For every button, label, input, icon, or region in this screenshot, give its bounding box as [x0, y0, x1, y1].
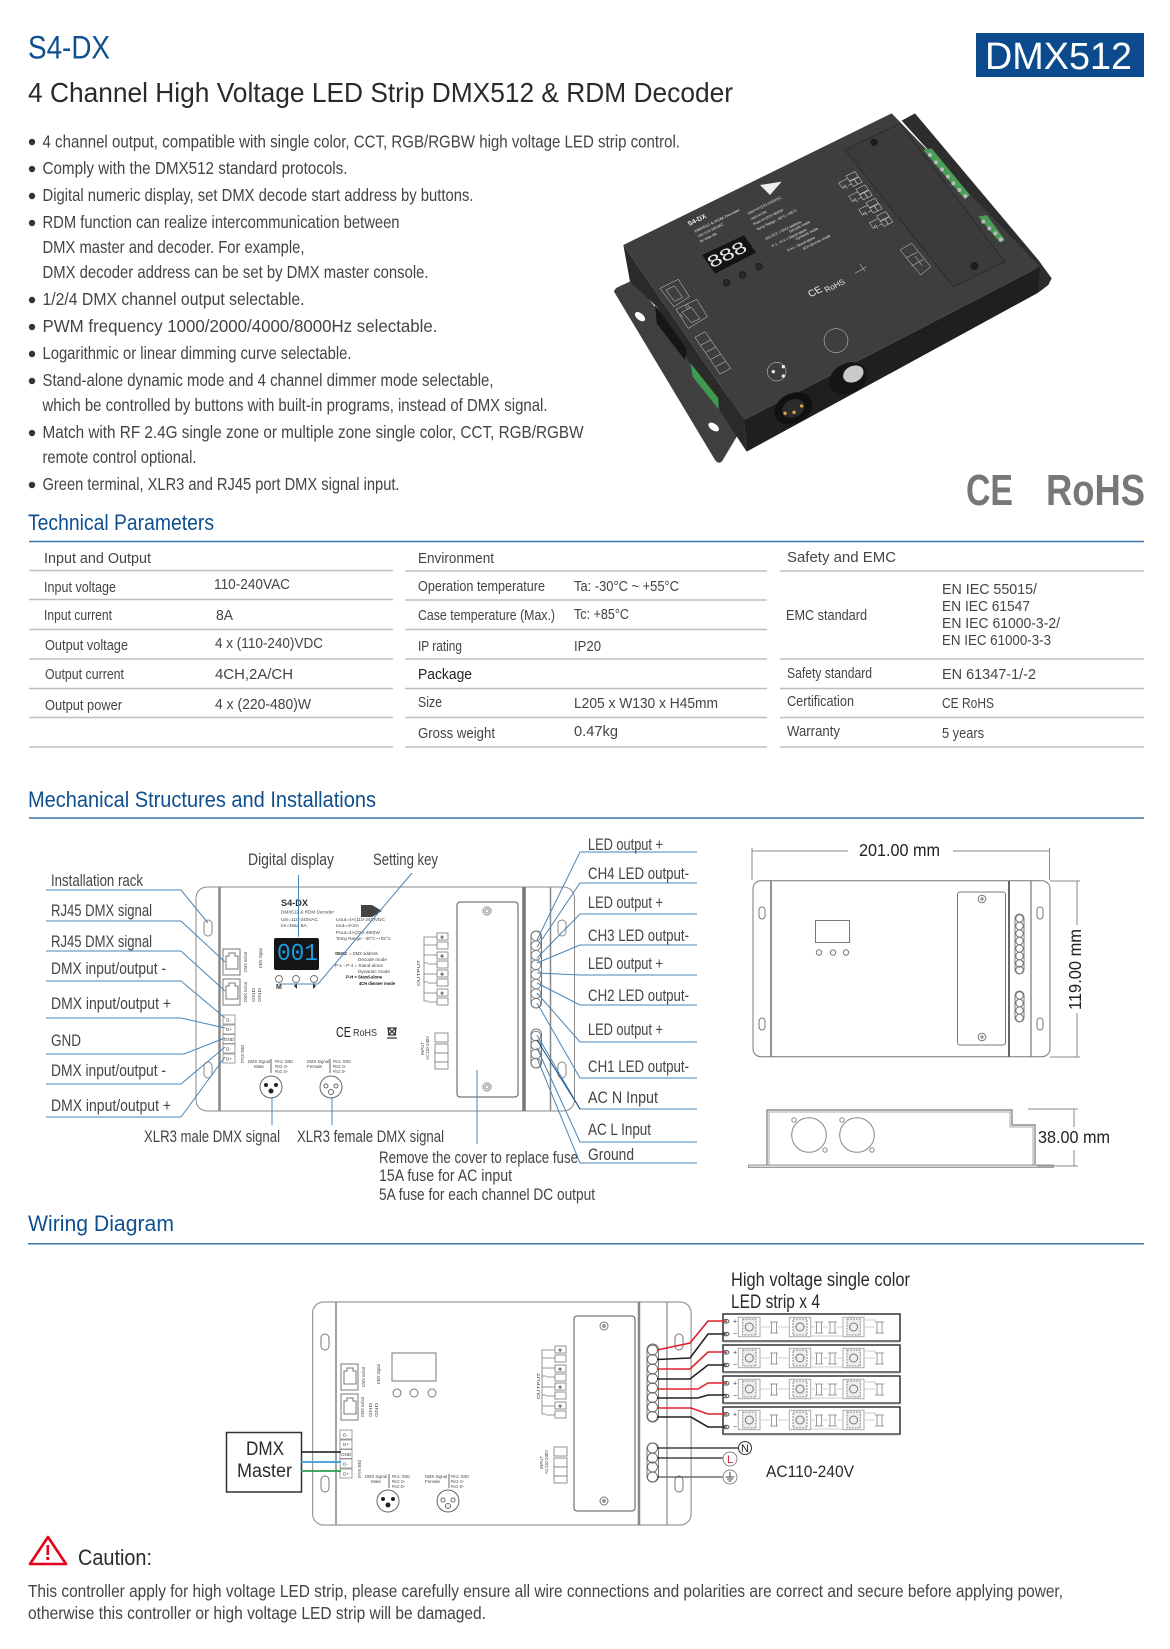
heading: Technical Parameters: Technical Parameters — [28, 510, 214, 535]
diagram: wiring device outline: DMX Signal — [365, 1474, 387, 1479]
callout labels: right: CH4 LED output- — [588, 864, 689, 883]
table: environment and package: Gross weight — [418, 725, 496, 742]
table: environment and package: IP rating — [418, 638, 462, 655]
feature list: Match with RF 2.4G single zone or multiple zone single color, CCT, RGB/RGBW — [42, 422, 584, 442]
diagram: device front panel with callouts: = DMX address — [349, 951, 379, 956]
diagram: device front panel with callouts: Pin3: D+ — [275, 1069, 288, 1074]
output terminal block — [531, 931, 542, 1008]
product photo: decoder device: RoHS — [823, 278, 847, 294]
diagram: device front panel with callouts: DMX In/out — [243, 981, 248, 1002]
diagram: device front panel with callouts: S4-DX — [281, 898, 308, 908]
feature list: DMX decoder address can be set by DMX master console. — [42, 262, 428, 282]
LED strip label — [731, 1270, 911, 1313]
callout labels: right: AC N Input — [588, 1088, 658, 1107]
diagram: device front panel with callouts: P-H = Stand-alone — [346, 974, 382, 980]
feature list: DMX master and decoder. For example, — [42, 237, 304, 257]
table: input and output: 4 x (220-480)W — [215, 696, 312, 713]
diagram: device front panel with callouts: Temp Range: -30°C~+55°C — [336, 936, 392, 941]
callout labels: top and bottom: Digital display — [248, 850, 334, 869]
AC input wires and symbols: L — [727, 1454, 733, 1466]
table: environment and package: IP20 — [574, 638, 601, 655]
diagram: wiring device outline: Pin1: GND — [451, 1474, 470, 1479]
diagram: device front panel with callouts: + — [440, 972, 444, 978]
product subtitle: 4 Channel High Voltage LED Strip DMX512 & RDM Decoder — [28, 77, 733, 108]
callout labels: left: DMX input/output + — [51, 994, 171, 1013]
diagram: wiring device outline: GND — [374, 1402, 379, 1417]
diagram: device front panel with callouts: DMX Signal — [307, 1059, 329, 1064]
feature list — [29, 132, 680, 494]
product photo: decoder device: Iin=Max 8A — [699, 232, 718, 243]
callout labels: left: GND — [51, 1031, 81, 1050]
table: environment and package: 0.47kg — [574, 723, 618, 740]
table: safety and EMC: Safety standard — [787, 665, 872, 682]
diagram: device front panel with callouts: CE — [336, 1024, 351, 1041]
callout labels: top and bottom: Remove the cover to replace fuse — [379, 1148, 578, 1167]
diagram: device front panel with callouts: Pin1: GND — [333, 1059, 352, 1064]
table: environment and package: L205 x W130 x H45mm — [574, 695, 718, 712]
callout labels: left: DMX input/output - — [51, 959, 166, 978]
CE RoHS certification logos: RoHS — [1046, 466, 1145, 515]
diagram: wiring device outline: DMX Signal — [376, 1364, 381, 1384]
diagram: device front panel with callouts: Male — [254, 1064, 264, 1069]
diagram: wiring device outline: D+ — [343, 1442, 349, 1447]
callout labels: left: Installation rack — [51, 871, 143, 890]
diagram: wiring device outline: D+ — [343, 1472, 349, 1476]
diagram: wiring device outline: INPUT — [539, 1456, 544, 1469]
product photo: decoder device: Temp Range: -30°C~+55°C — [756, 208, 798, 231]
diagram: device front panel with callouts: D- — [226, 1018, 231, 1022]
diagram: top view with dimensions — [752, 840, 1085, 1057]
diagram: wiring device outline: Pin3: D+ — [451, 1484, 464, 1489]
diagram: device front panel with callouts: DMX Signal — [258, 948, 263, 968]
table: safety and EMC: EN IEC 61000-3-3 — [942, 632, 1051, 649]
diagram: wiring device outline: Female — [425, 1479, 440, 1484]
diagram: device front panel with callouts: 001-512 — [335, 951, 347, 956]
diagram: top view with dimensions: 201.00 mm — [859, 840, 940, 860]
diagram: device front panel with callouts: GND — [224, 1037, 235, 1042]
diagram: device front panel with callouts: Pin2: D- — [333, 1064, 346, 1069]
diagram: device front panel with callouts: Pin2: D- — [275, 1064, 288, 1069]
LED strips x 4: + — [733, 1318, 737, 1326]
LED strips x 4: + — [733, 1380, 737, 1388]
feature list: Logarithmic or linear dimming curve selectable. — [42, 343, 352, 363]
callout labels: right: CH3 LED output- — [588, 926, 689, 945]
diagram: wiring device outline: GND — [341, 1452, 352, 1457]
diagram: wiring device outline: Pin2: D- — [451, 1479, 464, 1484]
table: environment and package: Operation temperature — [418, 578, 545, 595]
DMX signal wires — [301, 1452, 341, 1471]
product photo: decoder device: Uin=110-240VAC — [697, 222, 725, 238]
table: input and output: 8A — [216, 607, 233, 624]
LED strip wires — [657, 1321, 725, 1427]
AC input wires and symbols: N — [741, 1443, 749, 1455]
diagram: device front panel with callouts: P-1 - P-4 = Stand-alone — [335, 963, 383, 968]
diagram: device front panel with callouts: INPUT — [420, 1042, 425, 1055]
LED strips x 4: − — [733, 1424, 737, 1431]
diagram: device front panel with callouts: DMX In/out — [243, 951, 248, 972]
product photo: decoder device: DMX512 & RDM Decoder — [694, 208, 742, 233]
icon: caution triangle — [30, 1537, 66, 1564]
table: safety and EMC: EN IEC 61000-3-2/ — [942, 615, 1061, 632]
diagram: device front panel with callouts: Pin3: D+ — [333, 1069, 346, 1074]
diagram: device front panel with callouts: Pout=4×(220-480)W — [336, 930, 381, 935]
callout labels: left: RJ45 DMX signal — [51, 901, 152, 920]
LED strips x 4: + — [733, 1412, 737, 1418]
diagram: wiring device outline: D- — [343, 1432, 348, 1438]
DMX512 badge: DMX512 — [985, 36, 1132, 78]
diagram: wiring device outline: Pin1: GND — [392, 1474, 411, 1479]
diagram: device front panel with callouts: GND — [251, 987, 256, 1002]
diagram: device front panel with callouts: DMX Signal — [248, 1059, 270, 1064]
CE RoHS certification logos — [966, 466, 1145, 515]
diagram: device front panel with callouts: Decode mode — [358, 957, 387, 962]
table: environment and package: Case temperature (Max.) — [418, 607, 555, 624]
product photo: decoder device: P-1 - P-4 = Stand-alone — [771, 228, 808, 248]
feature list: remote control optional. — [42, 447, 196, 467]
callout labels: right — [588, 835, 689, 1164]
callout labels: right: LED output + — [588, 893, 663, 912]
diagram: wiring device outline: Male — [371, 1479, 381, 1484]
callout lines — [46, 852, 697, 1163]
diagram: wiring device outline: Pin3: D+ — [392, 1484, 405, 1489]
diagram: device front panel with callouts: Iin=Max 8A — [281, 923, 308, 928]
table: input and output: Output current — [45, 666, 125, 683]
diagram: device front panel with callouts: Female — [307, 1064, 322, 1069]
diagram: top view with dimensions: 119.00 mm — [1065, 929, 1085, 1010]
LED strips x 4: − — [733, 1393, 737, 1400]
diagram: device front panel with callouts: DMX In/out — [240, 1045, 245, 1064]
callout labels: right: CH1 LED output- — [588, 1057, 689, 1076]
DMX master box: Master — [237, 1461, 293, 1482]
diagram: device front panel with callouts: GND — [257, 987, 262, 1002]
diagram: wiring device outline: + — [558, 1404, 562, 1410]
caution heading: Caution: — [78, 1545, 152, 1570]
table: safety and EMC: EN 61347-1/-2 — [942, 666, 1036, 683]
feature list: PWM frequency 1000/2000/4000/8000Hz selectable. — [42, 316, 438, 336]
product photo: decoder device: S4-DX — [686, 213, 709, 228]
feature list: Green terminal, XLR3 and RJ45 port DMX signal input. — [42, 474, 400, 494]
table: environment and package: Environment — [418, 550, 495, 567]
diagram: wiring device outline: DMX Signal — [425, 1474, 447, 1479]
product photo: decoder device: Uout=4×(110-240)VDC — [747, 196, 783, 215]
diagram: device front panel with callouts: Uin=110-240VAC — [281, 917, 319, 922]
table: safety and EMC: EMC standard — [786, 607, 867, 624]
diagram: device front panel with callouts: D- — [226, 1046, 231, 1052]
diagram: device front panel with callouts: Dynamic mode — [358, 969, 390, 974]
diagram: device front panel with callouts: + — [440, 954, 444, 960]
heading: Wiring Diagram: Wiring Diagram — [28, 1211, 174, 1236]
diagram: wiring device outline: DMX In/out — [360, 1396, 365, 1417]
product photo: decoder device: Pout=4×(220-480)W — [752, 208, 785, 226]
table: environment and package — [405, 550, 767, 747]
callout labels: left: RJ45 DMX signal — [51, 932, 152, 951]
table: safety and EMC — [780, 549, 1144, 747]
caution text — [28, 1581, 1063, 1623]
product photo: decoder device: Iout=4×2A — [750, 210, 768, 221]
callout labels: right: LED output + — [588, 835, 663, 854]
caution text: This controller apply for high voltage LED strip, please carefully ensure all wire connections and polarities are correct and secure before applying power, — [28, 1581, 1063, 1601]
LED strips x 4: + — [733, 1350, 737, 1356]
callout labels: top and bottom: XLR3 female DMX signal — [297, 1127, 444, 1146]
callout labels: left — [51, 871, 171, 1115]
table: input and output: Output voltage — [45, 637, 128, 654]
product photo: decoder device: 001-512 = DMX address — [764, 220, 802, 241]
feature list: Digital numeric display, set DMX decode start address by buttons. — [42, 185, 474, 205]
table: input and output: Output power — [45, 697, 122, 714]
callout labels: right: LED output + — [588, 954, 663, 973]
heading: Mechanical Structures and Installations: Mechanical Structures and Installations — [28, 787, 376, 812]
table: input and output — [29, 550, 393, 747]
table: input and output: Input and Output — [44, 550, 152, 567]
diagram: wiring device outline: Pin2: D- — [392, 1479, 405, 1484]
feature list: 1/2/4 DMX channel output selectable. — [42, 289, 304, 309]
table: safety and EMC: CE RoHS — [942, 695, 994, 712]
CE RoHS certification logos: CE — [966, 466, 1013, 515]
AC voltage label: AC110-240V — [766, 1462, 855, 1481]
diagram: device front panel with callouts: RoHS — [353, 1028, 377, 1039]
DMX master box — [226, 1432, 302, 1492]
diagram: device front panel with callouts: + — [440, 990, 444, 998]
diagram: device front panel with callouts: 4CH dimmer mode — [359, 981, 395, 986]
diagram: wiring device outline: DMX In/out — [361, 1366, 366, 1387]
feature list: Stand-alone dynamic mode and 4 channel dimmer mode selectable, — [42, 370, 494, 390]
table: safety and EMC: Warranty — [787, 723, 840, 740]
diagram: wiring device outline: DMX In/out — [357, 1460, 362, 1479]
diagram: wiring device outline: + — [558, 1384, 562, 1392]
LED strip label: LED strip x 4 — [731, 1292, 820, 1313]
feature list: 4 channel output, compatible with single color, CCT, RGB/RGBW high voltage LED strip control. — [42, 132, 680, 152]
diagram: side view with height dimension: 38.00 mm — [1038, 1127, 1110, 1147]
LED strips x 4: − — [733, 1331, 737, 1338]
AC terminal block — [531, 1029, 542, 1068]
diagram: wiring device outline: + — [558, 1366, 562, 1374]
product photo: decoder device: Decode mode — [788, 220, 811, 233]
product photo: decoder device: 4CH dimmer mode — [802, 234, 831, 251]
DMX master box: DMX — [246, 1439, 284, 1460]
table: input and output: 4 x (110-240)VDC — [215, 635, 323, 652]
callout labels: right: AC L Input — [588, 1120, 651, 1139]
diagram: device front panel with callouts: + — [440, 934, 444, 942]
LED strips x 4 — [723, 1314, 900, 1434]
product photo: decoder device: Dynamic mode — [795, 227, 819, 241]
table: safety and EMC: Safety and EMC — [787, 549, 896, 566]
product photo: decoder device: 888 — [703, 237, 751, 272]
product photo: decoder device: CE — [806, 284, 825, 300]
callout labels: left: DMX input/output + — [51, 1096, 171, 1115]
table: safety and EMC: EN IEC 55015/ — [942, 581, 1038, 598]
callout labels: top and bottom: Setting key — [373, 850, 438, 869]
table: environment and package: Size — [418, 694, 442, 711]
diagram: device front panel with callouts: AC110-240V — [425, 1035, 430, 1060]
diagram: device front panel with callouts — [46, 835, 697, 1204]
diagram: device front panel with callouts: D+ — [226, 1027, 232, 1032]
table: input and output: 4CH,2A/CH — [215, 666, 293, 683]
diagram: wiring device outline: D- — [343, 1462, 348, 1466]
diagram: device front panel with callouts: Iout=4×2A — [336, 923, 360, 928]
product photo: decoder device: P-H = Stand-alone — [787, 236, 816, 252]
table: safety and EMC: EN IEC 61547 — [942, 598, 1030, 615]
AC input wires and symbols — [657, 1442, 752, 1484]
digital display: 001 — [277, 941, 318, 968]
LED strip label: High voltage single color — [731, 1270, 911, 1291]
callout labels: right: Ground — [588, 1145, 634, 1164]
diagram: device front panel with callouts: DMX512 & RDM Decoder — [281, 910, 334, 914]
product model title: S4-DX — [28, 30, 110, 66]
callout labels: right: LED output + — [588, 1020, 663, 1039]
diagram: wiring device outline: GND — [368, 1402, 373, 1417]
LED strips x 4: − — [733, 1362, 737, 1369]
table: environment and package: Ta: -30°C ~ +55°C — [574, 578, 679, 595]
callout labels: top and bottom: XLR3 male DMX signal — [144, 1127, 280, 1146]
feature list: which be controlled by buttons with built-in programs, instead of DMX signal. — [42, 395, 547, 415]
diagram: wiring device outline: + — [558, 1348, 562, 1354]
feature list: Comply with the DMX512 standard protocols. — [42, 158, 348, 178]
callout labels: top and bottom — [144, 850, 595, 1204]
diagram: wiring device outline: OUTPUT — [536, 1373, 541, 1399]
callout labels: left: DMX input/output - — [51, 1061, 166, 1080]
table: input and output: 110-240VAC — [214, 576, 290, 593]
table: safety and EMC: Certification — [787, 693, 854, 710]
table: environment and package: Package — [418, 666, 472, 683]
diagram: device front panel with callouts: OUTPUT — [416, 960, 421, 986]
table: environment and package: Tc: +85°C — [574, 606, 629, 623]
diagram: device front panel with callouts: M — [276, 984, 282, 991]
caution text: otherwise this controller or high voltage LED strip will be damaged. — [28, 1603, 486, 1623]
table: safety and EMC: 5 years — [942, 725, 984, 742]
diagram: wiring device outline — [313, 1302, 691, 1525]
feature list: RDM function can realize intercommunication between — [42, 212, 400, 232]
callout labels: top and bottom: 15A fuse for AC input — [379, 1166, 512, 1185]
diagram: side view with height dimension — [748, 1109, 1110, 1168]
diagram: device front panel with callouts: D+ — [226, 1056, 232, 1062]
diagram: device front panel with callouts: Uout=4×(110-240)VDC — [336, 917, 386, 922]
table: input and output: Input current — [44, 607, 113, 624]
table: input and output: Input voltage — [44, 579, 116, 596]
callout labels: right: CH2 LED output- — [588, 986, 689, 1005]
diagram: wiring device outline: AC110-240V — [544, 1449, 549, 1474]
callout labels: top and bottom: 5A fuse for each channel DC output — [379, 1185, 595, 1204]
diagram: device front panel with callouts: Pin1: GND — [275, 1059, 294, 1064]
product photo: decoder device — [614, 113, 1052, 463]
